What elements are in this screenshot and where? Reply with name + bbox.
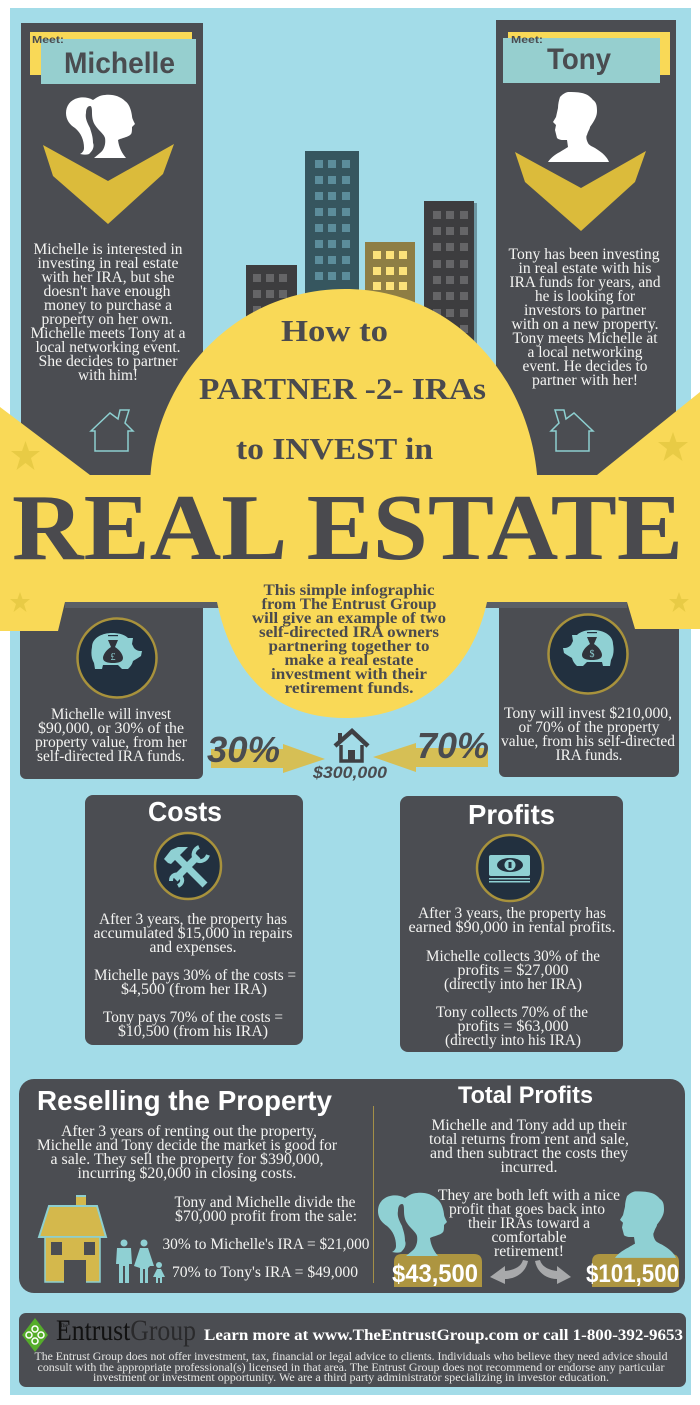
- intro text: retirement funds.: [284, 680, 414, 697]
- Tony story text: with on a new property.: [512, 316, 658, 333]
- profit division text: [162, 1194, 370, 1281]
- Michelle story text: with her IRA, but she: [42, 269, 174, 286]
- Costs text: After 3 years, the property has: [99, 911, 287, 928]
- Total Profits text: and then subtract the costs they: [430, 1145, 628, 1162]
- panel: Tony investment: [499, 602, 679, 777]
- Profits text: (directly into his IRA): [445, 1032, 581, 1049]
- panel: Reselling and Total Profits: [19, 1079, 685, 1293]
- icon: star top right: [658, 432, 688, 461]
- Costs text: $4,500 (from her IRA): [121, 981, 267, 998]
- logo wordmark: The: [60, 1324, 69, 1329]
- Reselling heading: Reselling the Property: [37, 1085, 332, 1116]
- Profits text: (directly into her IRA): [444, 976, 582, 993]
- gold box Michelle: [394, 1254, 482, 1287]
- buildings skyline: [246, 151, 477, 371]
- icon: star bottom left: [10, 592, 30, 612]
- icon: house property: [335, 731, 368, 761]
- icon: man silhouette: [548, 92, 609, 162]
- Tony story text: investors to partner: [524, 302, 647, 319]
- Tony investment text: Tony will invest $210,000,: [504, 705, 672, 722]
- logo wordmark: EntrustGroup: [56, 1314, 196, 1347]
- Michelle story text: money to purchase a: [44, 297, 172, 314]
- Tony name label: Meet:: [511, 34, 543, 46]
- Michelle story text: local networking event.: [36, 339, 180, 356]
- yellow title circle: [150, 289, 538, 718]
- disclaimer: [34, 1351, 668, 1384]
- panel: footer: [19, 1313, 686, 1387]
- panel: Michelle investment: [20, 602, 203, 779]
- Total Profits text: their IRAs toward a: [468, 1215, 590, 1232]
- Michelle investment text: $90,000, or 30% of the: [38, 720, 184, 737]
- Profits text: After 3 years, the property has: [418, 905, 606, 922]
- Tony story text: partner with her!: [532, 372, 638, 389]
- Michelle story text: property on her own.: [42, 311, 172, 328]
- Tony name label: Tony: [547, 43, 611, 76]
- arrow: to Michelle: [490, 1260, 528, 1284]
- panel: Michelle: [21, 23, 203, 478]
- Michelle story text: investing in real estate: [38, 255, 178, 272]
- intro text: from The Entrust Group: [262, 596, 437, 613]
- icon: star top left: [11, 441, 40, 470]
- icon: family: [116, 1240, 165, 1283]
- arrow: 70 percent: 70%: [417, 725, 489, 766]
- disclaimer: investment or investment opportunity. We are a third party administrator specializing in investor education.: [93, 1372, 609, 1384]
- Tony story text: [508, 246, 660, 389]
- Tony story text: in real estate with his: [518, 260, 652, 277]
- arrow: 70 percent: [373, 725, 489, 772]
- icon: piggy bank dollar: [548, 614, 628, 694]
- arrow: to Tony: [535, 1260, 571, 1284]
- Michelle investment text: property value, from her: [35, 734, 188, 751]
- Reselling text: Michelle and Tony decide the market is good for: [37, 1137, 338, 1154]
- Michelle story text: [30, 241, 186, 384]
- Total Profits text: incurred.: [500, 1159, 558, 1176]
- Michelle story text: Michelle meets Tony at a: [30, 325, 186, 342]
- Costs text: Michelle pays 30% of the costs =: [94, 967, 296, 984]
- title: to INVEST in: [236, 431, 433, 466]
- title: How to: [281, 313, 388, 348]
- Michelle investment text: [35, 706, 188, 765]
- Total Profits text: comfortable: [492, 1229, 566, 1246]
- Profits text: earned $90,000 in rental profits.: [408, 919, 616, 936]
- Tony investment text: or 70% of the property: [518, 719, 660, 736]
- Michelle story text: with him!: [78, 367, 138, 384]
- Reselling text: [37, 1123, 338, 1182]
- intro text: This simple infographic: [264, 582, 434, 599]
- Tony investment text: [501, 705, 675, 764]
- title: [12, 313, 683, 580]
- icon: Entrust logo: [22, 1318, 48, 1352]
- Tony investment text: IRA funds.: [556, 747, 622, 764]
- intro text: will give an example of two: [252, 610, 446, 627]
- Reselling text: a sale. They sell the property for $390,000,: [50, 1151, 324, 1168]
- Tony story text: Tony has been investing: [508, 246, 660, 263]
- intro text: make a real estate: [284, 652, 414, 669]
- Tony story text: a local networking: [528, 344, 642, 361]
- profit division text: 30% to Michelle's IRA = $21,000: [162, 1236, 370, 1253]
- icon: woman silhouette: [66, 95, 135, 158]
- icon: man silhouette teal: [615, 1191, 676, 1258]
- intro text: [252, 582, 446, 697]
- Total Profits text: retirement!: [494, 1243, 564, 1260]
- Tony investment text: value, from his self-directed: [501, 733, 675, 750]
- icon: star bottom right: [669, 592, 689, 612]
- Michelle story text: Michelle is interested in: [34, 241, 182, 258]
- panel: Tony: [496, 20, 676, 478]
- Costs text: $10,500 (from his IRA): [118, 1023, 268, 1040]
- title: PARTNER -2- IRAs: [199, 371, 486, 406]
- profit division text: 70% to Tony's IRA = $49,000: [172, 1264, 358, 1281]
- icon: house outline right: [551, 410, 593, 451]
- Tony story text: IRA funds for years, and: [510, 274, 660, 291]
- panel: Profits: [400, 796, 623, 1052]
- Michelle investment text: self-directed IRA funds.: [37, 748, 185, 765]
- Reselling text: After 3 years of renting out the property,: [61, 1123, 317, 1140]
- yellow banner: [0, 392, 700, 631]
- Profits text: Michelle collects 30% of the: [426, 948, 600, 965]
- Total Profits text: Michelle and Tony add up their: [432, 1117, 627, 1134]
- Michelle name label: [30, 32, 196, 84]
- arrow: 30 percent: [207, 729, 325, 773]
- icon: yellow house: [39, 1195, 106, 1283]
- disclaimer: The Entrust Group does not offer investment, tax, financial or legal advice to clients. Individuals who believe they need advice should: [34, 1351, 668, 1363]
- icon: chevron: [43, 144, 174, 224]
- Tony story text: event. He decides to: [522, 358, 648, 375]
- Profits text: Tony collects 70% of the: [436, 1004, 588, 1021]
- icon: piggy bank dollar: $: [590, 649, 594, 660]
- Michelle name label: Michelle: [64, 47, 175, 80]
- Tony story text: Tony meets Michelle at: [512, 330, 658, 347]
- Total Profits heading: Total Profits: [458, 1082, 593, 1109]
- Tony total amount: $101,500: [586, 1260, 679, 1288]
- intro text: self-directed IRA owners: [259, 624, 439, 641]
- Tony name label: [503, 32, 670, 83]
- Tony story text: he is looking for: [535, 288, 636, 305]
- icon: piggy bank pound: £: [110, 652, 116, 663]
- profit division text: Tony and Michelle divide the: [174, 1194, 356, 1211]
- Costs text: accumulated $15,000 in repairs: [94, 925, 292, 942]
- Michelle investment text: Michelle will invest: [51, 706, 172, 723]
- Total Profits text: They are both left with a nice: [438, 1187, 620, 1204]
- footer call to action: Learn more at www.TheEntrustGroup.com or call 1-800-392-9653: [204, 1327, 683, 1344]
- icon: woman silhouette teal: [378, 1193, 447, 1256]
- Michelle total amount: $43,500: [392, 1260, 478, 1288]
- Total Profits text: profit that goes back into: [449, 1201, 605, 1218]
- Reselling text: incurring $20,000 in closing costs.: [78, 1165, 296, 1182]
- Profits text: profits = $27,000: [458, 962, 568, 979]
- Michelle name label: Meet:: [32, 34, 64, 46]
- Costs text: [94, 911, 296, 1040]
- panel: Costs: [85, 795, 303, 1045]
- icon: money stack: [477, 835, 543, 901]
- icon: house outline left: [91, 410, 133, 451]
- banner shadow strip: [65, 602, 627, 608]
- icon: chevron: [515, 151, 646, 231]
- Michelle story text: doesn't have enough: [44, 283, 170, 300]
- intro text: partnering together to: [268, 638, 430, 655]
- Profits heading: Profits: [468, 799, 555, 830]
- gold box Tony: [592, 1254, 679, 1287]
- profit division text: $70,000 profit from the sale:: [175, 1208, 357, 1225]
- disclaimer: consult with the appropriate professional(s) licensed in that area. The Entrust Group does not recommend or endorse any particular: [38, 1362, 665, 1374]
- title: REAL ESTATE: [12, 476, 683, 580]
- Costs heading: Costs: [148, 796, 222, 827]
- Profits text: [408, 905, 616, 1049]
- Total Profits text: [378, 1117, 679, 1287]
- arrow: 30 percent: 30%: [207, 729, 280, 770]
- intro text: investment with their: [271, 666, 427, 683]
- Michelle story text: She decides to partner: [38, 353, 178, 370]
- property value label: $300,000: [312, 763, 388, 782]
- icon: piggy bank pound: [78, 618, 156, 698]
- Total Profits text: total returns from rent and sale,: [429, 1131, 629, 1148]
- Costs text: and expenses.: [150, 939, 236, 956]
- icon: hammer and wrench: [155, 833, 221, 899]
- Profits text: profits = $63,000: [458, 1018, 568, 1035]
- Costs text: Tony pays 70% of the costs =: [103, 1009, 283, 1026]
